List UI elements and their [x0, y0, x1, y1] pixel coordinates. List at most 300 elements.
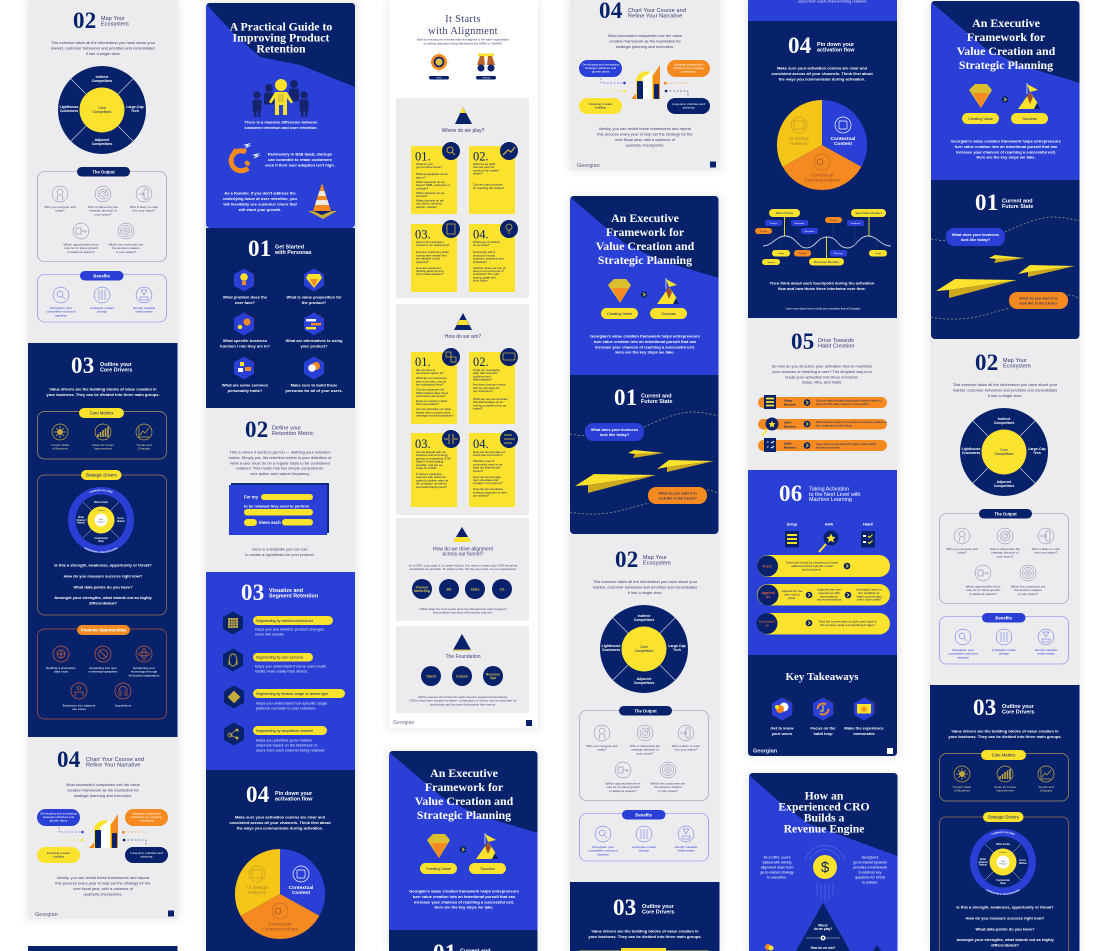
icon: pyramid outline	[453, 634, 471, 651]
panel: benefits: Strengthen your	[952, 648, 974, 652]
yellow cards: where?	[473, 172, 483, 176]
panel: 02 map your ecosystem, column 6	[930, 338, 1080, 685]
foundation circles: Ops	[490, 676, 496, 680]
panel: 02 map your ecosystem, column 1	[28, 0, 178, 343]
panel: 04 pin down your activation flow, column 5	[748, 0, 897, 318]
chart: strategy diagram: strategic initiatives and	[585, 66, 616, 70]
row: generative ai: AI	[765, 624, 769, 628]
panel: promote opportunities: use cases	[72, 707, 86, 711]
chart: touchpoint wave timeline: Becomes Member	[814, 260, 839, 264]
chart: pie of activation comms: Contextual	[289, 886, 313, 891]
icon: dollar coin: $	[821, 859, 830, 876]
heading: across our funnel?	[442, 552, 484, 558]
moment row: habit: Moment	[784, 445, 796, 449]
yellow cards: the company, as well as	[416, 482, 447, 486]
closing text: Then think about each touchpoint during the activation	[770, 280, 874, 286]
icon: trophy	[136, 287, 152, 303]
chart: ecosystem wheel: Customers	[60, 109, 78, 113]
intro text: increase your chances of reaching a successful exit.	[956, 149, 1056, 154]
chart: strategy diagram: Long-term priorities and	[672, 102, 705, 106]
row: generative ai: Generative	[759, 620, 775, 624]
column labels	[787, 522, 874, 526]
panel: the output	[38, 167, 166, 262]
panel: 04 chart your course, column 1: strategic planning and execution.	[74, 793, 132, 798]
icon: key	[73, 223, 89, 239]
panel: cro revenue engine hero	[749, 773, 898, 951]
yellow cards: expert?	[473, 407, 483, 411]
template box: to be retained they need to perform	[244, 504, 310, 508]
title: Experienced CRO	[778, 800, 870, 814]
chart: strategy diagram: monitoring	[681, 70, 696, 74]
persona captions: personas for all of your users.	[285, 388, 343, 393]
panel: 06 taking activation to the next level	[748, 470, 897, 655]
heading: machine learning: Machine Learning	[809, 497, 852, 503]
segment pills: Segmenting by user persona	[256, 656, 304, 660]
panel: strategic drivers: What data points do you have?	[975, 926, 1035, 931]
panel: executive framework hero, column 4: increase your chances of reaching a successful exit.	[595, 344, 695, 349]
heading: 02: 02	[245, 417, 268, 442]
heading: get started: with Personas	[274, 250, 312, 256]
panel: executive framework hero, column 3: Creating Value	[426, 867, 451, 871]
output captions: Which opportunities there	[63, 242, 99, 246]
panel: strategic drivers: Niche & Size	[996, 844, 1011, 846]
chart: ecosystem wheel: Competitors	[994, 421, 1014, 425]
yellow cards: target? SMB, enterprise or	[416, 183, 450, 187]
chart: strategic driver wheel: COMPANY CULTURE	[90, 489, 113, 494]
yellow cards: Can we articulate our value	[416, 407, 451, 411]
text: left intro: alignment down from	[761, 866, 793, 870]
icon: footer square	[710, 162, 716, 168]
text: left intro: go-to-market strategy	[760, 870, 794, 874]
yellow cards: 02.	[473, 150, 489, 164]
foundation circles: Revenue	[486, 672, 500, 676]
heading: 05: 05	[791, 329, 814, 354]
panel: the output	[940, 509, 1068, 604]
output captions: Which key customers are	[109, 242, 143, 246]
note: technology and process that assists their teams.	[430, 702, 496, 706]
panel: the output: the decision-makers	[654, 785, 682, 789]
segment pills: Segmenting by acquisition channel	[256, 729, 313, 733]
intro text: Georgian's value creation framework helps entrepreneurs	[951, 138, 1061, 144]
chart: strategy diagram: Integrate prospective	[132, 812, 161, 816]
panel: 01 get started with personas	[206, 228, 355, 408]
intro text: break your activation into three moments:	[785, 374, 859, 379]
panel: 03 outline your core drivers, column 6	[930, 685, 1080, 951]
text: left intro: As a CRO, you're	[763, 856, 791, 860]
title: Revenue Engine	[784, 822, 864, 836]
panel: core metrics: Improvement	[94, 447, 112, 451]
description: predictable as possible. To achieve this, the five key parts of your organization	[410, 567, 517, 571]
yellow cards: What are our customers	[416, 376, 447, 380]
function circles: CS	[500, 587, 505, 591]
yellow cards: our customers?	[473, 389, 493, 393]
panel: core metrics: Trends and	[136, 443, 152, 447]
closing text: Ideally, you can revisit these frameworks and repeat	[599, 126, 691, 131]
panel: strategic drivers: Amongst your strengths, what stands out as highly	[956, 937, 1055, 942]
panel: strategic drivers: Market	[1019, 862, 1027, 865]
panel: benefits: relationships	[1037, 652, 1055, 656]
row: applied ai: recommendations	[817, 598, 842, 602]
panel: the output: strategic direction of	[991, 551, 1019, 555]
yellow cards: How are customers	[416, 266, 441, 270]
panel: 04 chart your course, column 4	[570, 0, 720, 170]
panel: the output: today?	[597, 748, 607, 752]
function circles: BD	[447, 587, 452, 591]
panel: 02 map your ecosystem, column 4: This exercise takes all the information you have about your	[593, 579, 697, 584]
yellow cards: use (direct, inbound,	[416, 202, 442, 206]
intro text: creation framework as the foundation for	[609, 38, 681, 44]
heading: 04: 04	[788, 33, 812, 58]
yellow cards: What segments do we	[416, 180, 445, 184]
yellow cards: problems and	[473, 374, 491, 378]
panel: strategic drivers	[939, 812, 1069, 951]
opportunities captions: Building a proprietary	[46, 666, 76, 670]
yellow cards: clearly with a concise story	[416, 410, 451, 414]
chart: touchpoint wave timeline: Feedback	[851, 223, 861, 225]
chart: strategic driver wheel: Niche & Size	[94, 502, 109, 504]
panel: strategic drivers: Your	[1001, 861, 1005, 863]
chart: ecosystem wheel: Large-Cap	[1028, 447, 1046, 451]
panel: executive framework hero, column 4: Future State	[641, 399, 672, 405]
persona captions: What specific business	[223, 338, 267, 343]
persona captions: What problem does the	[223, 294, 267, 300]
yellow cards: solving their needs? Are	[416, 253, 447, 257]
text: saas: Particularly in B2B SaaS, startups	[268, 152, 332, 156]
segment pills	[253, 616, 345, 735]
chart: touchpoint wave timeline: Prompt	[770, 222, 777, 225]
row: applied ai: user now to	[784, 592, 800, 596]
chart: strategic driver wheel: Product	[98, 509, 105, 512]
segment descriptions: users from each channel being retained.	[256, 748, 325, 752]
chart: ecosystem wheel: Adjacent	[95, 138, 109, 142]
chart: pie of activation comms: Content	[834, 141, 852, 147]
chart: ecosystem wheel	[960, 408, 1048, 496]
row: generative ai: Find the conversation to pull users back to	[819, 620, 877, 624]
persona captions: What is value proposition for	[286, 294, 342, 300]
panel: the output: into your space?	[1035, 551, 1058, 555]
intro text: So how do you structure your activation flow to maximize	[772, 364, 872, 368]
chart: strategic driver wheel: Market	[117, 520, 125, 523]
chart: strategic driver wheel: Channel	[76, 520, 86, 522]
strategic questions: Is this a strength, weakness, opportunity or threat?	[54, 562, 152, 568]
yellow cards: 01.	[415, 355, 431, 369]
panel: 02 map your ecosystem, column 6: 02	[975, 350, 998, 375]
icon: door	[136, 186, 152, 202]
strategic questions: differentiated?	[89, 600, 117, 605]
foundation circles: Talent	[426, 674, 437, 678]
intro text: your business. They can be divided into three main groups.	[46, 392, 160, 397]
heading: 02: 02	[73, 8, 96, 33]
chart: ecosystem wheel: Lighthouse	[962, 447, 980, 451]
footer: georgian logo: Georgian	[577, 163, 600, 169]
icon: search	[53, 287, 69, 303]
function circles	[412, 579, 512, 599]
yellow cards: deep on a narrow set of	[473, 269, 504, 273]
panel: executive framework hero, column 4: What does your business	[591, 427, 638, 432]
panel: the output: Who you compete with	[586, 744, 618, 748]
yellow cards: jobs to be done, and do	[415, 379, 447, 383]
moment row: aha: Show users the value of the product as early as possible so	[816, 421, 887, 424]
panel: benefits: narrative	[957, 655, 969, 659]
chart: ecosystem wheel: Adjacent	[637, 677, 651, 681]
chart: strategic driver wheel: Go-to-	[118, 518, 124, 520]
intro text: This is where it starts to get fun — defining your retention	[229, 450, 331, 454]
chart: strategic driver wheel: Order	[78, 517, 84, 519]
chart: strategy diagram: strategic initiatives and	[43, 815, 74, 819]
yellow cards: Are we aligned with our	[416, 450, 446, 454]
icon: side navy	[873, 945, 881, 951]
note: CROs oversee the funnel for each revenue segment and industry.	[418, 695, 508, 699]
row: applied ai: Anticipate users in	[856, 588, 882, 592]
heading: How do we drive alignment	[433, 546, 493, 552]
yellow cards: What industries do we	[416, 191, 445, 195]
chart: ecosystem wheel	[600, 605, 688, 693]
intro text: turn value creation into an intentional pursuit that can	[955, 144, 1058, 149]
title: Improving Product	[233, 30, 330, 44]
yellow cards: user advocates and	[473, 478, 499, 482]
text: right intro: questions for CROs	[855, 876, 886, 880]
yellow cards: that we can solve for	[473, 386, 500, 390]
panel: promote opportunities: third-party integrations	[129, 673, 160, 677]
heading: drive towards: Drive Towards	[818, 338, 854, 344]
benefits captions: change	[97, 310, 107, 314]
panel: 05 drive towards habit creation	[748, 318, 897, 470]
panel: 03 outline your core drivers, column 6: your business. They can be divided into three main groups.	[948, 734, 1062, 739]
intro text: Here are the key steps we take.	[976, 155, 1036, 160]
chart: ecosystem wheel: Adjacent	[997, 480, 1011, 484]
yellow cards: our product?	[473, 494, 490, 498]
footer: georgian logo: Georgian	[393, 720, 414, 726]
chart: ecosystem wheel: Competitors	[92, 79, 112, 83]
benefits captions	[46, 306, 155, 317]
persona captions: your product?	[300, 344, 328, 348]
panel: strategic drivers: Is this a strength, weakness, opportunity or threat?	[956, 904, 1054, 910]
row: applied ai: Applied	[761, 591, 775, 595]
icon: side orange	[765, 944, 774, 950]
title: Retention	[256, 42, 306, 56]
callout: today: What does your business	[952, 232, 999, 237]
title: A Practical Guide to	[230, 20, 332, 34]
callout: today	[946, 228, 1005, 246]
panel: core metrics: Changes	[138, 447, 151, 451]
panel: executive framework hero, column 4: 01	[614, 385, 637, 410]
panel: the output: Who is likely to enter	[672, 744, 700, 748]
yellow cards: differentiated value these	[416, 391, 449, 395]
chart: strategy diagram: planning	[683, 106, 695, 110]
yellow cards: tools follow.	[473, 279, 488, 283]
foundation circles	[421, 666, 503, 686]
row: applied ai: Augment the user	[817, 588, 841, 592]
panel: strategic drivers: Commercial	[996, 880, 1010, 882]
panel: strategic drivers	[37, 470, 167, 616]
persona captions: What are some common	[222, 382, 268, 388]
panel: promote opportunities: Acquisitions	[115, 704, 132, 708]
panel: the output: may be for future growth	[966, 588, 1000, 592]
panel: executive framework hero, column 3: increase your chances of reaching a successful exit.	[414, 899, 514, 904]
yellow cards: pricing, goals and	[473, 275, 496, 279]
title: Value Creation and	[957, 44, 1056, 58]
benefits captions: Anticipate market	[90, 306, 114, 310]
output captions: your sector?	[94, 212, 112, 216]
panel: executive framework hero, column 3: Value Creation and	[415, 794, 514, 808]
panel: the foundation	[396, 626, 529, 713]
panel: core metrics: Areas for Future	[994, 785, 1016, 789]
yellow cards: for reaching the market?	[473, 186, 505, 190]
yellow cards: What do your	[416, 162, 433, 166]
text: left intro: tasked with driving	[763, 860, 791, 864]
chart: strategy diagram: planning	[141, 854, 153, 858]
panel: 03 outline your core drivers, column 4: 03	[613, 895, 636, 920]
yellow cards: Is there a marketing	[416, 472, 442, 476]
icon: binoculars v2mom	[476, 54, 496, 80]
panel: executive framework hero, column 3: Success	[480, 867, 495, 871]
yellow cards: Sales? Is that scaling	[416, 460, 444, 464]
icon: pyramid top	[455, 107, 472, 124]
panel: the output: your sector?	[636, 751, 654, 755]
chart: ecosystem wheel: Large-Cap	[126, 105, 144, 109]
chart: ecosystem wheel: Tech	[673, 648, 681, 652]
text: right intro: provides a framework	[853, 866, 887, 870]
panel: 03 outline your core drivers, column 6: Outline your	[1002, 704, 1034, 710]
panel: benefits: Identify valuable	[675, 845, 697, 849]
chart: touchpoint wave timeline: Signup	[768, 262, 775, 264]
yellow cards: Horizontal, with a	[473, 250, 496, 254]
yellow cards: from market leaders?	[416, 272, 444, 276]
benefits captions: narrative	[55, 313, 67, 317]
takeaway captions: your users	[772, 731, 793, 736]
panel: core metrics: Current State	[953, 785, 971, 789]
panel: benefits	[38, 271, 166, 322]
persona captions: Make sure to build these	[291, 382, 337, 388]
icon: dollar coin	[805, 845, 845, 902]
chart: touchpoint wave timeline: Contact	[799, 252, 807, 255]
icon: data moat	[53, 646, 69, 662]
chart: touchpoint wave timeline: Reminder	[805, 230, 815, 233]
yellow cards: we understand them?	[416, 383, 444, 387]
panel: the output: today?	[957, 551, 967, 555]
row: applied ai: AI	[766, 595, 770, 599]
chart: ecosystem wheel: Indirect	[638, 614, 650, 618]
output captions: Who you compete with	[44, 205, 76, 209]
panel: 02 map your ecosystem, column 4	[570, 535, 720, 882]
panel: promote opportunities: Promote Opportunities	[81, 628, 127, 632]
panel: executive framework hero, column 4: An Executive	[611, 211, 679, 225]
panel: next section start, column 1	[28, 946, 178, 951]
text: right intro: to address key	[859, 870, 882, 874]
chart: pie of activation comms: Patterns	[248, 890, 267, 896]
panel: the output: in adjacent spaces?	[969, 592, 997, 596]
yellow cards: industries? The right	[473, 272, 499, 276]
text: saas: can scramble to retain customers	[268, 157, 333, 162]
icon: acquisitions	[115, 683, 131, 699]
panel: executive framework hero, column 4: Value Creation and	[596, 239, 695, 253]
panel: benefits: competitive moat and	[588, 849, 618, 853]
callout: future	[1009, 292, 1068, 309]
panel: 04 chart your course, column 1	[28, 737, 178, 919]
heading: key takeaways: Key Takeaways	[785, 671, 859, 683]
title: An Executive	[972, 16, 1040, 30]
yellow cards: customer segments and	[473, 257, 504, 261]
icon: atom	[136, 646, 152, 662]
chart: touchpoint wave timeline: Pricing	[760, 230, 768, 233]
yellow cards: Whether a set of	[473, 459, 494, 463]
panel: executive framework hero, column 3: Georgian's value creation framework helps entrepreneurs	[409, 888, 519, 894]
icon: expansion people	[71, 683, 87, 699]
panel: benefits: Identify valuable	[1035, 648, 1057, 652]
icon badges	[442, 348, 518, 448]
yellow cards: groups on supporting GTM	[416, 456, 451, 460]
panel: 02 map your ecosystem, column 6: Map Your	[1003, 358, 1027, 364]
row: applied ai: even more useful	[857, 598, 881, 602]
foundation circles: Culture	[456, 674, 468, 678]
panel: 04 chart your course, column 1: next fiscal year, with a cadence of	[73, 886, 134, 891]
intro text: consistent across all your channels. Think first about	[771, 71, 873, 76]
panel: 03 visualize and segment retention	[206, 572, 355, 770]
panel: the output	[580, 706, 708, 800]
panel: 02 map your ecosystem, column 6: This exercise takes all the information you have about your	[953, 382, 1057, 387]
heading: outline your core drivers: Core Drivers	[100, 367, 132, 373]
chart: pie of activation comms: UI Design	[246, 886, 268, 891]
source note: Learn more about how to build your activation flow at Georgian	[786, 306, 861, 310]
intro text: it into a single view.	[86, 51, 120, 56]
icon: aha magnifier	[819, 530, 838, 552]
icon: bar growth	[95, 424, 111, 440]
callout: future: look like in the future?	[1020, 300, 1058, 306]
text: difference: customer retention and user retention.	[244, 125, 318, 130]
persona captions: personality traits?	[228, 388, 263, 393]
row: trust: Gain user's trust by showing you have	[786, 560, 838, 564]
yellow cards: their expectation?	[416, 402, 439, 406]
chart: strategic driver wheel: Moat	[98, 540, 104, 543]
panel: the output: Which opportunities there	[605, 782, 641, 786]
icon: pyramid middle	[454, 313, 472, 330]
moment row: habit: Keep users coming back with triggers and rewards	[816, 443, 876, 446]
panel: 04 chart your course, column 1: quarterly checkpoints.	[84, 892, 122, 896]
segment descriptions: channels based on the likelihood of	[256, 742, 318, 748]
panel: core metrics: Areas for Future	[92, 443, 114, 447]
panel: benefits	[580, 810, 708, 861]
chart: strategy diagram: Long-term priorities and	[130, 851, 163, 855]
icon: traffic cone	[308, 183, 337, 219]
takeaway captions: Get to know	[771, 726, 793, 730]
heading: get started: Get Started	[275, 244, 304, 250]
heading: 01: 01	[975, 190, 998, 215]
moment row: setup: Get your users through setup quickly; reduce friction to	[816, 400, 881, 402]
panel: executive framework hero, column 4: Success	[661, 312, 676, 316]
heading: visualize: Segment Retention	[269, 594, 318, 600]
panel: benefits: narrative	[597, 852, 609, 856]
template box: For my	[244, 494, 259, 500]
heading: define metric: Define your	[272, 426, 301, 432]
yellow cards: How are customers today	[416, 250, 449, 254]
chart: ecosystem wheel: Customers	[962, 451, 980, 455]
yellow cards: community, team or we	[473, 462, 503, 466]
text: founder: will stunt your growth.	[238, 207, 281, 212]
chart: ecosystem wheel: Competitors	[92, 142, 112, 146]
icon badges	[442, 142, 518, 238]
chart: touchpoint wave timeline: Reminder	[795, 222, 805, 225]
icon: summit flag	[1018, 83, 1040, 109]
chart: strategic driver wheel: Partner	[77, 522, 85, 525]
persona captions: the product?	[302, 300, 327, 305]
yellow cards: What can we communicate	[473, 397, 508, 401]
pill: creating value: Creating Value	[968, 117, 993, 121]
icon: trend chart	[136, 424, 152, 440]
function circles: Product	[416, 586, 428, 590]
output captions: Who is influencing the	[88, 205, 118, 209]
row: trust: and concerns.	[802, 567, 822, 571]
closing text: Here is a template you can use	[252, 546, 308, 552]
